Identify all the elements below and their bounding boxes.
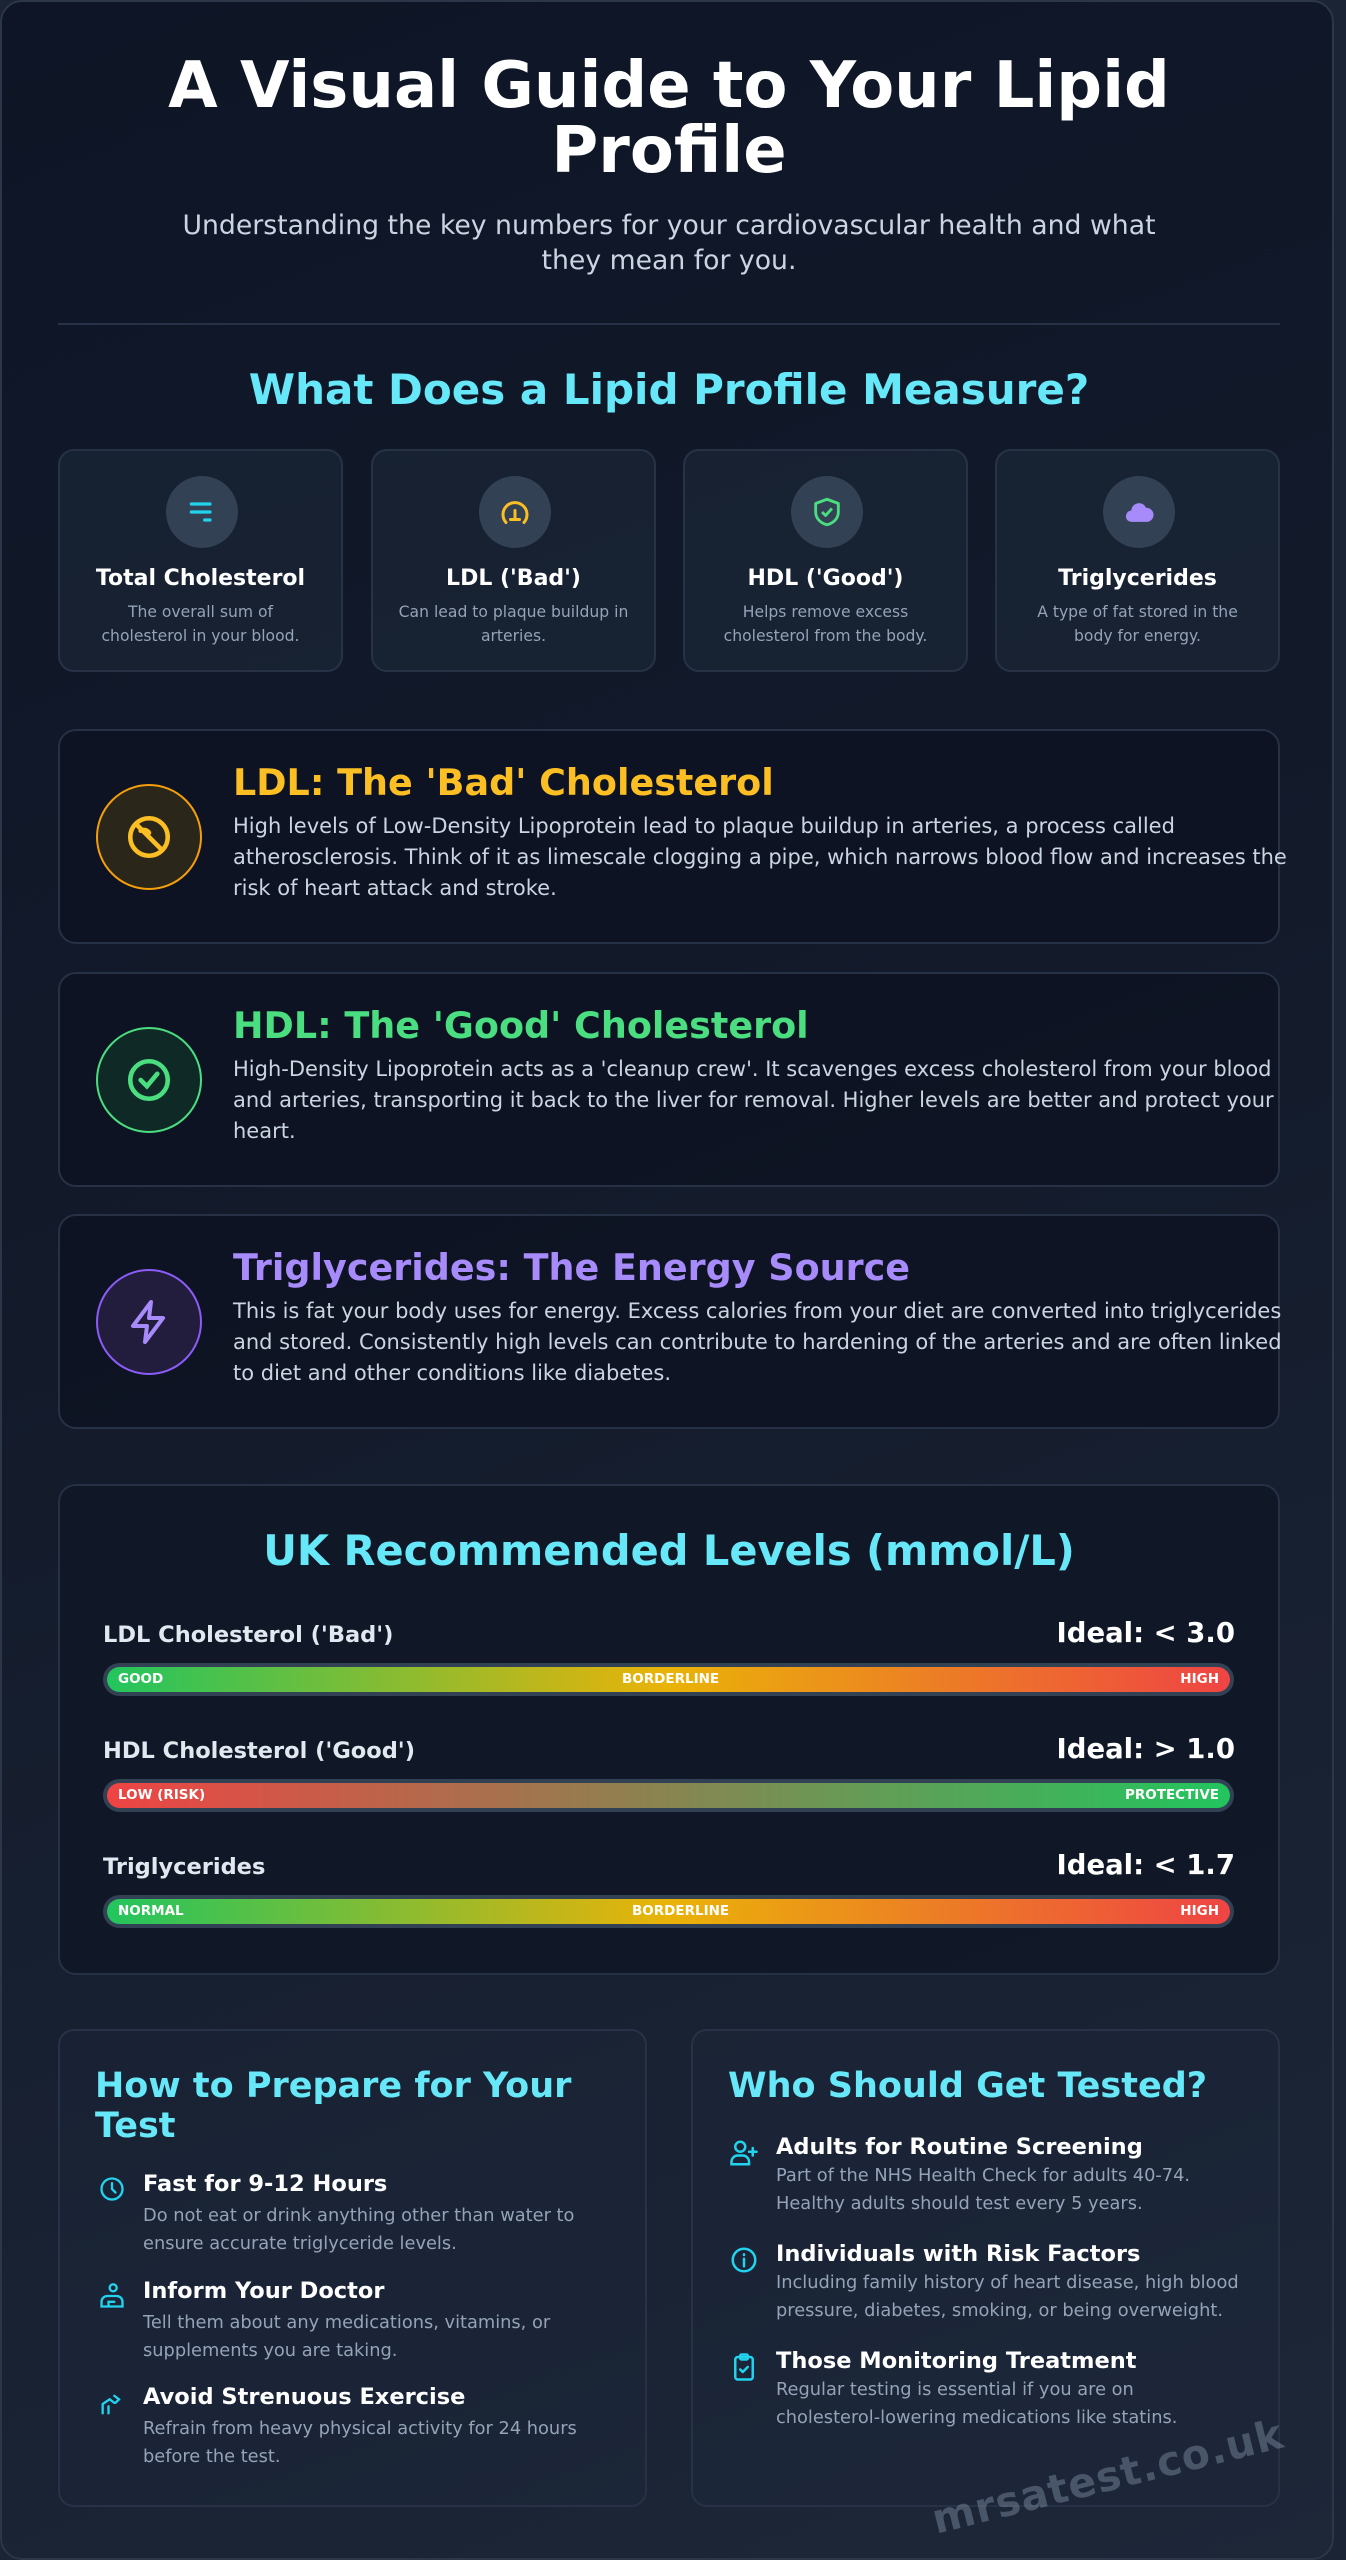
- icon: lines: [166, 476, 238, 548]
- item: fast: [100, 2171, 574, 2254]
- panel: who should get tested: [691, 2029, 1280, 2507]
- panel: LDL explanation: LDL: The 'Bad' Cholesterol: [233, 761, 774, 804]
- panel: HDL explanation: High-Density Lipoprotein acts as a 'cleanup crew'. It scavenges excess cholesterol from your blood: [233, 1057, 1272, 1081]
- triglycerides level: Triglycerides: [103, 1854, 265, 1880]
- item: avoid exercise: [102, 2384, 577, 2467]
- icon: clock: [100, 2177, 124, 2201]
- card: HDL: Helps remove excess cholesterol from the body.: [724, 603, 927, 645]
- bar: LDL: [103, 1663, 1234, 1696]
- item: inform doctor: [100, 2278, 550, 2361]
- card: triglycerides: A type of fat stored in the body for energy.: [1037, 603, 1238, 645]
- icon: shield: [791, 476, 863, 548]
- item: adults: [730, 2134, 1190, 2214]
- panel: triglycerides explanation: [58, 1214, 1280, 1429]
- item: inform doctor: Tell them about any medications, vitamins, or: [143, 2312, 550, 2333]
- item: monitoring: cholesterol-lowering medications like statins.: [776, 2407, 1177, 2428]
- panel: HDL explanation: [58, 972, 1280, 1187]
- item: risk factors: Including family history of heart disease, high blood: [776, 2272, 1239, 2293]
- title: Profile: [551, 114, 787, 188]
- item: fast: Do not eat or drink anything other than water to: [143, 2205, 574, 2226]
- bar: HDL: LOW (RISK): [118, 1787, 205, 1803]
- LDL level: [103, 1617, 1235, 1696]
- item: adults: Healthy adults should test every 5 years.: [776, 2193, 1143, 2214]
- panel: LDL explanation: risk of heart attack and stroke.: [233, 876, 557, 900]
- title: A Visual Guide to Your Lipid: [168, 49, 1170, 123]
- icon: clipboard: [734, 2353, 754, 2381]
- panel: triglycerides explanation: This is fat your body uses for energy. Excess calories from your diet are converted into triglycerides: [233, 1299, 1281, 1323]
- levels heading: UK Recommended Levels (mmol/L): [263, 1526, 1075, 1575]
- panel: HDL explanation: and arteries, transporting it back to the liver for removal. Higher levels are better and protect your: [233, 1088, 1274, 1112]
- heading: prepare: Test: [95, 2106, 176, 2146]
- HDL level: Ideal: > 1.0: [1057, 1733, 1235, 1765]
- card: total cholesterol: The overall sum of cholesterol in your blood.: [101, 603, 300, 645]
- item: adults: Part of the NHS Health Check for adults 40-74.: [776, 2165, 1190, 2186]
- subtitle: Understanding the key numbers for your cardiovascular health and what they mean for you.: [182, 210, 1156, 276]
- item: fast: ensure accurate triglyceride levels.: [143, 2233, 457, 2254]
- bar: HDL: PROTECTIVE: [1125, 1787, 1219, 1803]
- bar: triglycerides: NORMAL: [118, 1903, 184, 1919]
- card: HDL: [683, 449, 968, 672]
- card: triglycerides: Triglycerides: [1058, 566, 1217, 591]
- HDL level: HDL Cholesterol ('Good'): [103, 1738, 415, 1764]
- panel: UK recommended levels: [58, 1484, 1280, 1975]
- item: avoid exercise: Refrain from heavy physical activity for 24 hours: [143, 2418, 577, 2439]
- icon: ban: [96, 784, 202, 890]
- card: LDL: Can lead to plaque buildup in arteries.: [399, 603, 628, 645]
- title: [168, 49, 1170, 188]
- panel: LDL explanation: High levels of Low-Density Lipoprotein lead to plaque buildup in arteries, a process called: [233, 814, 1175, 838]
- card: triglycerides: [995, 449, 1280, 672]
- item: inform doctor: Inform Your Doctor: [143, 2278, 384, 2304]
- card: LDL: [371, 449, 656, 672]
- item: inform doctor: supplements you are taking.: [143, 2340, 397, 2361]
- item: avoid exercise: Avoid Strenuous Exercise: [143, 2384, 465, 2410]
- card: HDL: HDL ('Good'): [748, 566, 903, 591]
- bar: LDL: BORDERLINE: [622, 1671, 719, 1687]
- heading: prepare: How to Prepare for Your: [95, 2066, 571, 2106]
- card: LDL: LDL ('Bad'): [446, 566, 581, 591]
- item: avoid exercise: before the test.: [143, 2446, 281, 2467]
- triglycerides level: Ideal: < 1.7: [1057, 1849, 1235, 1881]
- bar: LDL: GOOD: [118, 1671, 163, 1687]
- item: monitoring: Regular testing is essential if you are on: [776, 2379, 1134, 2400]
- item: fast: Fast for 9-12 Hours: [143, 2171, 387, 2197]
- card: total cholesterol: Total Cholesterol: [96, 566, 305, 591]
- panel: LDL explanation: atherosclerosis. Think of it as limescale clogging a pipe, which narrows blood flow and increases the: [233, 845, 1287, 869]
- icon: bolt: [96, 1269, 202, 1375]
- icon: info: [732, 2248, 756, 2272]
- bar: triglycerides: BORDERLINE: [632, 1903, 729, 1919]
- item: monitoring: [734, 2348, 1177, 2428]
- panel: HDL explanation: heart.: [233, 1119, 296, 1143]
- panel: HDL explanation: HDL: The 'Good' Cholesterol: [233, 1004, 809, 1047]
- icon: check: [96, 1027, 202, 1133]
- HDL level: [103, 1733, 1235, 1812]
- watermark: mrsatest.co.uk: [927, 2410, 1288, 2544]
- LDL level: LDL Cholesterol ('Bad'): [103, 1622, 393, 1648]
- icon: gauge: [479, 476, 551, 548]
- item: risk factors: [732, 2241, 1239, 2321]
- card: total cholesterol: [58, 449, 343, 672]
- bar: LDL: HIGH: [1180, 1671, 1219, 1687]
- bar: triglycerides: [103, 1895, 1234, 1928]
- heading: who: Who Should Get Tested?: [728, 2066, 1207, 2106]
- icon: cloud: [1103, 476, 1175, 548]
- triglycerides level: [103, 1849, 1235, 1928]
- item: risk factors: Individuals with Risk Factors: [776, 2241, 1140, 2267]
- icon: exercise: [102, 2394, 121, 2414]
- panel: triglycerides explanation: Triglycerides: The Energy Source: [233, 1246, 910, 1289]
- LDL level: Ideal: < 3.0: [1057, 1617, 1235, 1649]
- panel: how to prepare: [58, 2029, 647, 2507]
- item: risk factors: pressure, diabetes, smoking, or being overweight.: [776, 2300, 1223, 2321]
- panel: triglycerides explanation: to diet and other conditions like diabetes.: [233, 1361, 671, 1385]
- bar: HDL: [103, 1779, 1234, 1812]
- heading: prepare: [95, 2066, 572, 2146]
- icon: user plus: [730, 2140, 758, 2166]
- item: monitoring: Those Monitoring Treatment: [776, 2348, 1137, 2374]
- panel: LDL explanation: [58, 729, 1280, 944]
- panel: triglycerides explanation: and stored. Consistently high levels can contribute to hardening of the arteries and are often linked: [233, 1330, 1282, 1354]
- bar: triglycerides: HIGH: [1180, 1903, 1219, 1919]
- item: adults: Adults for Routine Screening: [776, 2134, 1143, 2160]
- icon: doctor: [100, 2283, 124, 2308]
- section heading: what does it measure: What Does a Lipid Profile Measure?: [249, 365, 1089, 414]
